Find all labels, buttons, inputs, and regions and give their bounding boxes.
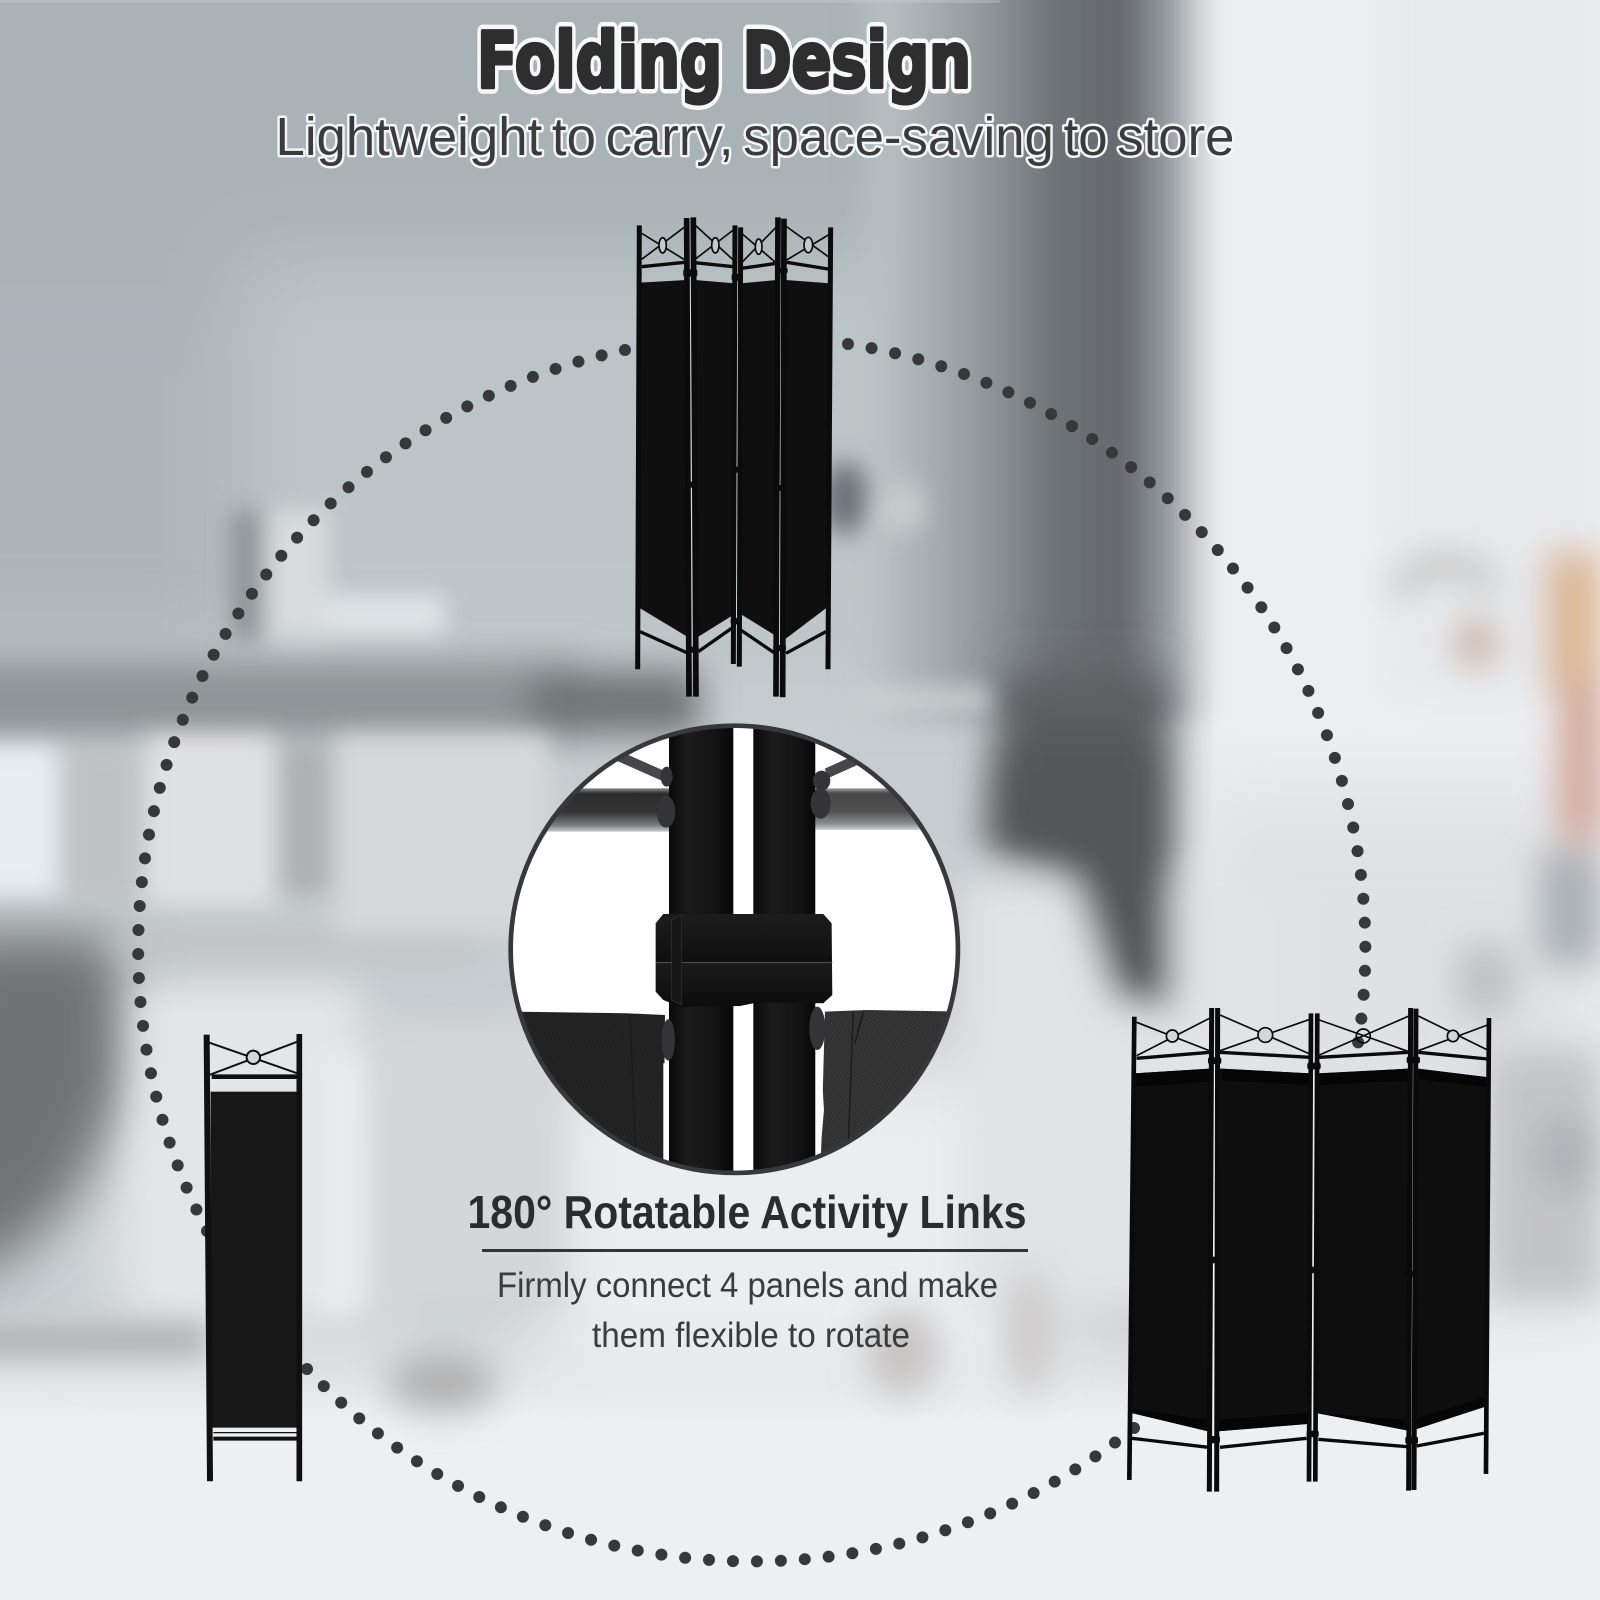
tubes xyxy=(669,710,733,1193)
detail circle: 180 degree hinge close-up xyxy=(508,723,960,1176)
hinge caption description: Firmly connect 4 panels and make xyxy=(497,1266,998,1305)
single folded panel, left xyxy=(207,1034,299,1481)
rails and lattice xyxy=(640,225,828,653)
fabric corners xyxy=(522,1012,665,1159)
white slits xyxy=(663,1063,665,1160)
hinge knobs xyxy=(1207,1057,1420,1444)
fabric xyxy=(211,1092,299,1428)
subtitle: Lightweight to carry, space-saving to store xyxy=(276,107,1234,167)
horizontal frame bars xyxy=(547,788,669,832)
circle border xyxy=(511,726,958,1173)
hinge caption description: them flexible to rotate xyxy=(592,1316,910,1355)
title: Folding Design xyxy=(477,17,971,106)
unfolded room divider, right xyxy=(1129,1008,1489,1492)
frame posts xyxy=(207,1034,299,1481)
panel hems xyxy=(1130,1069,1489,1432)
hinge caption description xyxy=(497,1266,998,1355)
fold gaps xyxy=(1213,1065,1413,1437)
rails and lattice xyxy=(1132,1015,1488,1447)
hinge knobs xyxy=(683,268,788,653)
fold gaps xyxy=(691,277,781,648)
caption divider line xyxy=(482,1249,1028,1252)
hinge caption heading: 180° Rotatable Activity Links xyxy=(468,1186,1026,1238)
frame posts xyxy=(638,217,831,697)
folded room divider, top xyxy=(638,217,831,697)
diagonal struts xyxy=(618,756,860,777)
rotating clamp xyxy=(656,914,832,1007)
fabric panels, folded xyxy=(638,280,831,639)
fabric panels xyxy=(1130,1069,1489,1432)
subtitle: Lightweight to carry, space-saving to store xyxy=(276,107,1234,167)
frame posts xyxy=(1129,1008,1489,1492)
title: Folding Design xyxy=(477,17,971,106)
dotted circle connecting the three screen positions xyxy=(138,344,1365,1561)
weld points xyxy=(657,767,831,1061)
